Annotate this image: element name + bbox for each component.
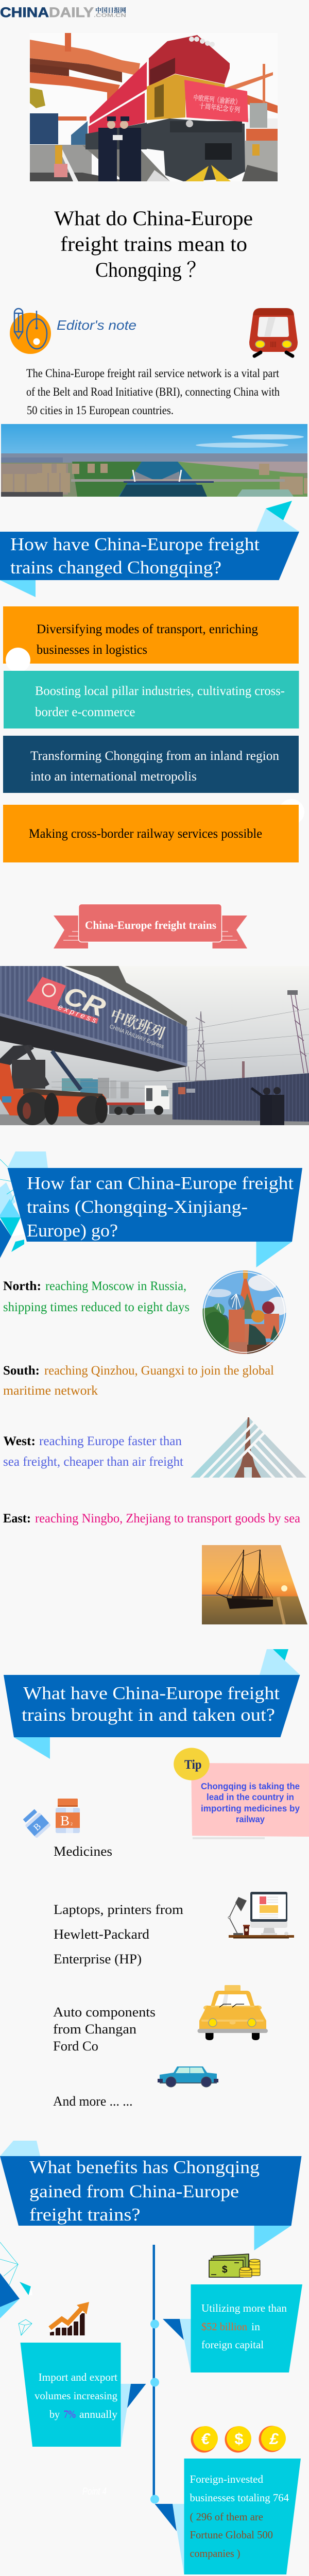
panel: import and export volumes	[21, 2343, 146, 2447]
ribbon: China-Europe freight trains	[54, 904, 247, 948]
icon: medicine bottles: 2	[71, 1822, 73, 1826]
text: editor's note body: The China-Europe freight rail service network is a vital part	[26, 367, 280, 380]
photo: locomotive at Chongqing with officers: 中欧班列（渝新欧）	[193, 93, 241, 107]
text: North route	[3, 1278, 190, 1314]
panel: import and export volumes: 7%	[64, 2408, 76, 2420]
main title: What do China-Europe	[54, 207, 253, 230]
text: West route: reaching Europe faster than	[39, 1433, 182, 1448]
main title	[54, 207, 253, 281]
panel: foreign-invested businesses: Fortune Global 500	[190, 2529, 273, 2541]
callout: tip note: lead in the country in	[207, 1792, 294, 1802]
photo: Saint Basil's Cathedral in a circle	[202, 1270, 289, 1354]
banner: What have China-Europe freight trains brought in and taken out?: What have China-Europe freight	[23, 1683, 280, 1703]
panel: cross-border railway services	[3, 799, 304, 862]
panel: foreign-invested businesses: ( 296 of them are	[190, 2511, 263, 2523]
panel: utilizing foreign capital: $52 billion	[201, 2320, 247, 2333]
text: South route	[3, 1363, 274, 1398]
decoration: polygon shards left of timeline	[0, 2242, 32, 2335]
panel: utilizing foreign capital: foreign capital	[201, 2338, 264, 2351]
logo: China Daily	[0, 5, 126, 20]
panel: utilizing foreign capital	[163, 2284, 302, 2372]
text: North route: reaching Moscow in Russia,	[45, 1278, 186, 1293]
text: North route: shipping times reduced to eight days	[3, 1299, 190, 1314]
panel: import and export volumes: volumes increasing	[35, 2389, 117, 2402]
text: West route: sea freight, cheaper than air freight	[3, 1454, 183, 1469]
main title: Chongqing ？	[95, 258, 206, 281]
text: West route	[3, 1433, 183, 1469]
heading: Editor's note: Editor's note	[57, 317, 136, 333]
banner: How have China-Europe freight trains changed Chongqing?: trains changed Chongqing?	[10, 557, 221, 578]
text: auto components	[53, 2005, 156, 2054]
panel: import and export volumes: Import and export	[39, 2371, 117, 2383]
panel: foreign-invested businesses: companies )	[190, 2547, 240, 2560]
icon: euro, dollar and pound coins	[191, 2426, 286, 2452]
banner: What benefits has Chongqing gained?	[0, 2141, 302, 2250]
photo: CR Express container lifted by reach stacker: express	[57, 1003, 98, 1025]
banner: How far can China-Europe freight trains go?	[7, 1168, 302, 1267]
panel: import and export volumes: by	[49, 2408, 60, 2420]
image: Eiffel Tower in striped triangle	[191, 1417, 306, 1479]
panel: cross-border railway services: Making cross-border railway services possible	[29, 826, 262, 841]
icon: euro, dollar and pound coins: €	[201, 2430, 211, 2448]
text: South route: maritime network	[3, 1383, 98, 1398]
text: South route: South:	[3, 1363, 40, 1378]
text: editor's note body	[26, 367, 280, 417]
panel: utilizing foreign capital: Utilizing more than	[201, 2302, 287, 2314]
text: editor's note body: of the Belt and Road Initiative (BRI), connecting China with	[26, 385, 280, 398]
icon: euro, dollar and pound coins: $	[234, 2430, 244, 2448]
text: laptops and printers	[54, 1902, 183, 1967]
banner: How far can China-Europe freight trains go?: trains (Chongqing-Xinjiang-	[27, 1197, 248, 1217]
panel: diversifying modes of transport	[3, 606, 299, 672]
callout: tip note: Tip	[184, 1758, 202, 1772]
banner: What benefits has Chongqing gained?: freight trains?	[29, 2205, 140, 2225]
text: auto components: Ford Co	[53, 2039, 98, 2054]
panel: transforming Chongqing: into an international metropolis	[30, 769, 197, 784]
photo: Chongqing city panorama	[1, 424, 309, 497]
logo: China Daily: .COM.CN	[94, 12, 126, 19]
icon: desk with computer and lamp	[228, 1892, 294, 1938]
icon: rising bar chart with arrow	[50, 2302, 89, 2335]
icon: medicine bottles	[21, 1799, 80, 1838]
photo: locomotive at Chongqing with officers	[30, 33, 278, 181]
icon: medicine bottles: B	[31, 1821, 43, 1833]
main title: freight trains mean to	[60, 232, 247, 256]
logo: China Daily: 中国日报网	[95, 6, 126, 14]
panel: transforming Chongqing	[3, 736, 299, 793]
icon: banknotes and coins	[209, 2254, 260, 2277]
decoration: polygon shards beside How far banner	[0, 1151, 48, 1258]
icon: yellow taxi	[198, 1985, 268, 2040]
banner: What benefits has Chongqing gained?: gained from China-Europe	[29, 2181, 239, 2201]
ribbon: China-Europe freight trains: China-Europe freight trains	[85, 919, 216, 931]
banner: What have China-Europe freight trains brought in and taken out?	[4, 1649, 300, 1759]
text: laptops and printers: Hewlett-Packard	[54, 1927, 149, 1942]
icon: red train	[249, 308, 298, 356]
banner: How have China-Europe freight trains changed Chongqing?: How have China-Europe freight	[10, 534, 260, 554]
icon: pencil and mouse	[10, 309, 51, 354]
panel: diversifying modes of transport: businesses in logistics	[37, 642, 147, 657]
text: West route: West:	[3, 1433, 36, 1448]
panel: diversifying modes of transport: Diversifying modes of transport, enriching	[37, 621, 258, 636]
text: and more: And more ... ...	[53, 2094, 133, 2109]
callout: tip note	[174, 1748, 309, 1839]
photo: CR Express container lifted by reach stacker: 中欧班列	[108, 1007, 167, 1043]
icon: blue car	[158, 2066, 218, 2087]
panel: utilizing foreign capital: in	[251, 2320, 260, 2333]
text: faint Point 4 placeholder: Point 4	[82, 2486, 107, 2497]
callout: tip note: Chongqing is taking the	[201, 1781, 300, 1791]
logo: China Daily: CHINA	[0, 5, 49, 20]
text: East route: reaching Ningbo, Zhejiang to transport goods by sea	[35, 1511, 300, 1526]
panel: foreign-invested businesses: Foreign-invested	[190, 2473, 263, 2485]
text: North route: North:	[3, 1278, 41, 1293]
banner: What benefits has Chongqing gained?: What benefits has Chongqing	[29, 2157, 260, 2177]
photo: CR Express container lifted by reach stacker: CR	[60, 980, 110, 1023]
text: East route: East:	[3, 1511, 31, 1526]
text: editor's note body: 50 cities in 15 European countries.	[27, 404, 174, 417]
photo: CR Express container lifted by reach stacker: CHINA RAILWAY Express	[109, 1024, 165, 1050]
banner: How far can China-Europe freight trains go?: How far can China-Europe freight	[27, 1173, 294, 1193]
callout: tip note: railway	[236, 1814, 265, 1824]
panel: foreign-invested businesses	[154, 2459, 301, 2574]
banner: How have China-Europe freight trains changed Chongqing?	[0, 501, 299, 597]
text: Medicines: Medicines	[54, 1844, 112, 1859]
panel: boosting local pillar industries	[4, 671, 299, 728]
text: laptops and printers: Enterprise (HP)	[54, 1952, 142, 1967]
panel: boosting local pillar industries: Boosting local pillar industries, cultivating cross-	[35, 683, 285, 698]
timeline: vertical line with dots	[150, 2245, 159, 2504]
banner: What have China-Europe freight trains brought in and taken out?: trains brought in and taken out?	[22, 1705, 275, 1725]
text: South route: reaching Qinzhou, Guangxi to join the global	[44, 1363, 274, 1378]
logo: China Daily: DAILY	[49, 5, 94, 20]
text: auto components: from Changan	[53, 2022, 136, 2037]
photo: CR Express container lifted by reach stacker	[0, 966, 309, 1125]
icon: medicine bottles: B	[60, 1813, 70, 1828]
panel: transforming Chongqing: Transforming Chongqing from an inland region	[30, 748, 279, 763]
text: auto components: Auto components	[53, 2005, 156, 2020]
photo: locomotive at Chongqing with officers: 十周年纪念专列	[199, 101, 241, 114]
callout: tip note: importing medicines by	[201, 1803, 300, 1814]
icon: banknotes and coins: $	[222, 2264, 228, 2275]
photo: sailing ship at sunset	[202, 1545, 308, 1624]
text: laptops and printers: Laptops, printers from	[54, 1902, 183, 1917]
icon: euro, dollar and pound coins: £	[269, 2430, 279, 2448]
banner: How far can China-Europe freight trains go?: Europe) go?	[27, 1221, 118, 1241]
panel: import and export volumes: annually	[79, 2408, 117, 2420]
panel: foreign-invested businesses: businesses totaling 764	[190, 2492, 289, 2504]
panel: boosting local pillar industries: border e-commerce	[35, 704, 135, 719]
